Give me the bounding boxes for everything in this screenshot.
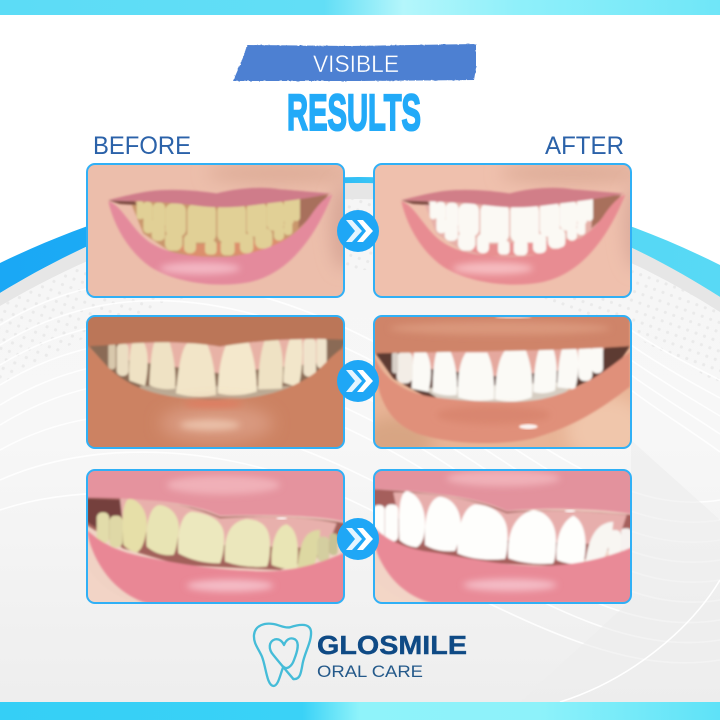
photo: row 1 before, yellow teeth (88, 165, 343, 296)
logo tagline: ORAL CARE: ORAL CARE (317, 662, 423, 681)
background swoosh (0, 177, 720, 702)
heading tape: VISIBLE (233, 44, 476, 81)
photo: row 1 after, white teeth (375, 165, 630, 296)
icon: tooth with heart logo (254, 624, 311, 686)
label: BEFORE: BEFORE (93, 132, 191, 160)
panel border: row 1 after (374, 164, 631, 297)
photo: row 3 before, green-yellow teeth (88, 471, 343, 602)
arrow: row 1 (337, 210, 379, 252)
photo: row 2 before, tan teeth (88, 317, 343, 447)
photo: row 3 after, white teeth (375, 471, 630, 602)
top bar (0, 0, 720, 15)
arrow: row 2 (337, 360, 379, 402)
arrow: row 3 (337, 518, 379, 560)
panel border: row 1 before (87, 164, 344, 297)
photo: row 2 after, white teeth (375, 317, 630, 447)
panel border: row 3 before (87, 470, 344, 603)
label: AFTER: AFTER (545, 132, 624, 160)
panel border: row 2 before (87, 316, 344, 448)
panel border: row 2 after (374, 316, 631, 448)
heading tape: VISIBLE: VISIBLE (313, 51, 399, 78)
panel border: row 3 after (374, 470, 631, 603)
bottom bar (0, 702, 720, 720)
heading: RESULTS: RESULTS (287, 84, 421, 141)
logo wordmark: GLOSMILE: GLOSMILE (317, 630, 467, 660)
